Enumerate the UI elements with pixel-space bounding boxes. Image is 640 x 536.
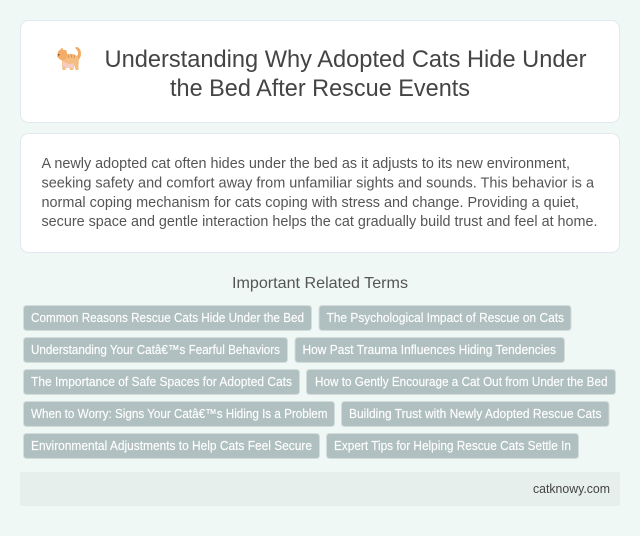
description text bbox=[42, 155, 598, 230]
footer site name: catknowy.com bbox=[533, 481, 610, 496]
title text: the Bed After Rescue Events bbox=[170, 75, 470, 102]
tag: Environmental Adjustments to Help Cats Feel Secure bbox=[31, 438, 312, 453]
tag bbox=[24, 434, 320, 458]
tag bbox=[319, 306, 571, 330]
tag: The Importance of Safe Spaces for Adopted Cats bbox=[31, 374, 292, 389]
tag bbox=[24, 370, 300, 394]
tag: Understanding Your Catâ€™s Fearful Behaviors bbox=[31, 342, 280, 357]
tag: How Past Trauma Influences Hiding Tendencies bbox=[302, 342, 556, 357]
tag bbox=[24, 338, 288, 362]
tag bbox=[295, 338, 564, 362]
icon: cat bbox=[57, 47, 81, 70]
description text: seeking safety and comfort away from unfamiliar sights and sounds. This behavior is a bbox=[42, 174, 595, 192]
tag bbox=[342, 402, 609, 426]
tag: When to Worry: Signs Your Catâ€™s Hiding Is a Problem bbox=[31, 406, 328, 421]
heading: related terms: Important Related Terms bbox=[232, 275, 408, 292]
title text bbox=[104, 46, 587, 102]
description text: secure space and gentle interaction helps the cat gradually build trust and feel at home. bbox=[42, 213, 598, 230]
tag: How to Gently Encourage a Cat Out from Under the Bed bbox=[315, 374, 608, 389]
description text: normal coping mechanism for cats coping with stress and change. Providing a quiet, bbox=[42, 194, 579, 211]
tag bbox=[306, 370, 616, 394]
tag bbox=[24, 402, 334, 426]
tag: The Psychological Impact of Rescue on Cats bbox=[326, 310, 564, 325]
footer bbox=[20, 472, 620, 506]
tag: Expert Tips for Helping Rescue Cats Settle In bbox=[334, 438, 571, 453]
tag: Common Reasons Rescue Cats Hide Under the Bed bbox=[31, 310, 304, 325]
panel: description bbox=[20, 134, 620, 252]
tag bbox=[326, 434, 578, 458]
panel: title card bbox=[20, 20, 620, 122]
tag list bbox=[24, 306, 616, 458]
title text: Understanding Why Adopted Cats Hide Under bbox=[104, 46, 587, 73]
tag: Building Trust with Newly Adopted Rescue Cats bbox=[349, 406, 602, 421]
tag bbox=[24, 306, 312, 330]
description text: A newly adopted cat often hides under the bed as it adjusts to its new environment, bbox=[42, 155, 570, 172]
